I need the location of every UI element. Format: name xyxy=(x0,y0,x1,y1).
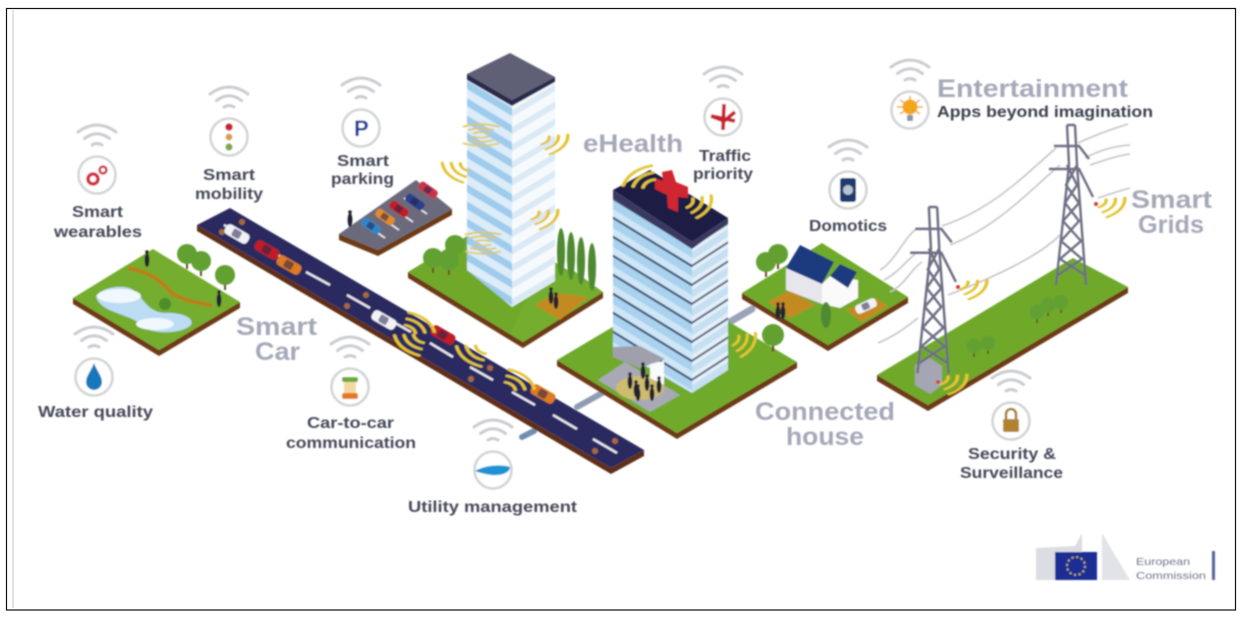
power wires xyxy=(878,124,1130,343)
European Commission logo xyxy=(1036,533,1215,582)
label: Smart wearables: wearables xyxy=(53,224,142,241)
European Commission logo: Commission xyxy=(1136,570,1206,582)
European Commission logo: European xyxy=(1136,556,1190,568)
label: Smart parking: Smart xyxy=(337,153,390,170)
label: Smart Car xyxy=(236,313,318,366)
park tile with lake xyxy=(73,244,240,356)
icon: parking: P xyxy=(354,116,369,141)
label: Connected house xyxy=(755,398,895,451)
label: eHealth: eHealth xyxy=(583,130,683,158)
label: Smart Car: Car xyxy=(255,338,300,366)
icon: domotics tablet xyxy=(829,140,867,208)
label: Car-to-car communication: Car-to-car xyxy=(307,415,394,432)
label: Traffic priority: Traffic xyxy=(699,148,751,165)
icon: traffic light xyxy=(210,87,248,156)
label: Apps beyond imagination: Apps beyond imagination xyxy=(937,104,1153,121)
icon: parking xyxy=(342,78,380,146)
icon: smart wearables xyxy=(78,125,116,194)
parking tile xyxy=(339,180,452,256)
icon: padlock xyxy=(992,371,1030,440)
label: Smart parking: parking xyxy=(331,171,394,188)
label: Smart parking xyxy=(331,153,394,188)
icon: light bulb xyxy=(891,60,929,128)
label: Smart mobility: mobility xyxy=(195,186,263,203)
label: Car-to-car communication: communication xyxy=(286,435,416,452)
label: Domotics: Domotics xyxy=(809,218,887,235)
hospital building xyxy=(613,170,728,393)
label: Smart mobility: Smart xyxy=(203,167,256,184)
label: Smart Grids: Grids xyxy=(1138,211,1204,239)
label: Utility management: Utility management xyxy=(408,499,578,516)
label: Car-to-car communication xyxy=(286,415,416,452)
label: Connected house: house xyxy=(786,423,864,451)
pylon near xyxy=(910,207,956,373)
crowd at hospital entrance xyxy=(628,362,661,401)
icon: utility pipe xyxy=(474,420,512,488)
label: Traffic priority xyxy=(693,148,753,183)
label: Security and Surveillance: Surveillance xyxy=(960,465,1063,482)
hospital plot xyxy=(557,290,797,439)
label: Smart Grids xyxy=(1131,186,1213,239)
label: Connected house: Connected xyxy=(755,398,895,426)
pylon far xyxy=(1049,125,1093,285)
pipes between plots xyxy=(522,309,752,437)
icon: traffic priority xyxy=(704,67,742,136)
label: Water quality: Water quality xyxy=(38,404,153,421)
label: Traffic priority: priority xyxy=(693,166,753,183)
label: Smart Grids: Smart xyxy=(1131,186,1213,214)
label: Smart wearables xyxy=(53,204,142,241)
icon: water drop xyxy=(75,327,113,396)
label: Entertainment: Entertainment xyxy=(937,75,1129,103)
red cross on hospital roof xyxy=(655,170,688,212)
road with cars xyxy=(197,208,644,474)
yellow signal waves xyxy=(391,124,1130,396)
connected house plot xyxy=(742,243,908,351)
label: Smart wearables: Smart xyxy=(72,204,124,221)
label: Security and Surveillance xyxy=(960,446,1063,482)
power line plot xyxy=(877,258,1128,411)
office tower xyxy=(467,53,555,307)
office tower plot xyxy=(408,222,603,348)
icon: car-to-car xyxy=(331,337,369,406)
label: Smart mobility xyxy=(195,167,263,203)
label: Smart Car: Smart xyxy=(236,313,318,341)
label: Security and Surveillance: Security & xyxy=(968,446,1056,463)
